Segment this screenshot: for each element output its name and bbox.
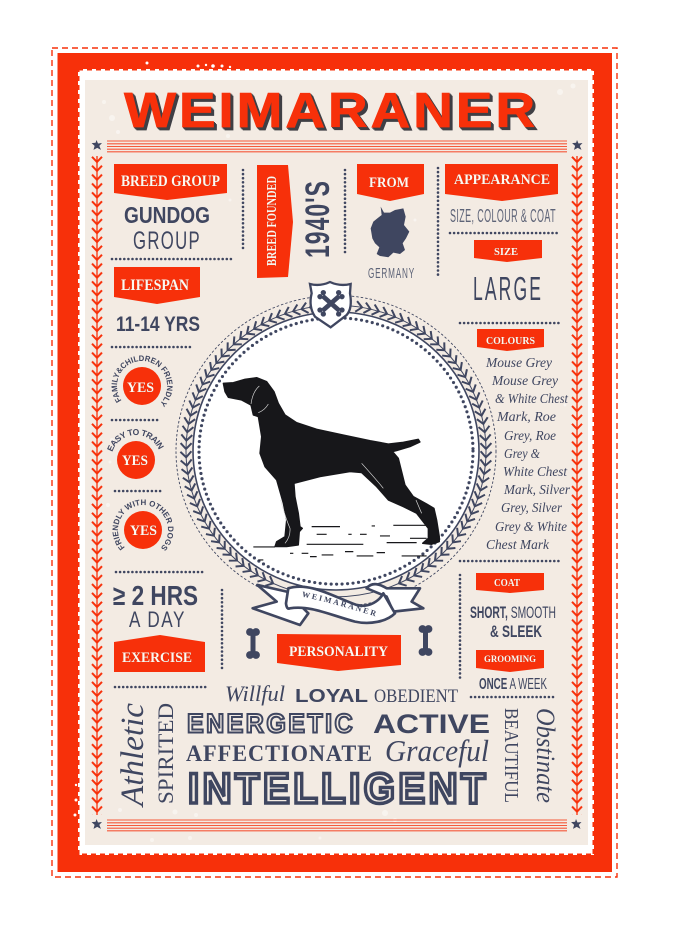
coat ribbon — [476, 573, 544, 593]
yes badge: easy to train — [107, 429, 164, 479]
personality word cloud — [115, 681, 560, 812]
size ribbon: SIZE — [494, 247, 518, 258]
colours list: Mark, Roe — [496, 410, 556, 425]
word: athletic: Athletic — [115, 703, 151, 808]
central dog medallion — [176, 280, 496, 626]
name banner — [251, 582, 425, 626]
breed founded ribbon — [257, 165, 293, 278]
colours list: Mouse Grey — [485, 356, 553, 371]
appearance ribbon: APPEARANCE — [454, 172, 550, 188]
lifespan value: 11-14 YRS — [116, 313, 200, 336]
colours list — [485, 356, 571, 553]
coat value — [470, 603, 556, 641]
colours list: Grey & White — [495, 520, 567, 535]
yes badge: family and children friendly: FAMILY&CHILDREN FRIENDLY — [112, 356, 173, 408]
yes badge: friendly with other dogs: YES — [130, 523, 157, 539]
grooming ribbon — [476, 650, 544, 672]
colours list: White Chest — [503, 465, 568, 480]
colours list: & White Chest — [495, 392, 569, 407]
word: obstinate: Obstinate — [531, 708, 560, 803]
star top right — [572, 140, 582, 150]
word: energetic: ENERGETIC — [187, 710, 355, 739]
title: WEIMARANER — [124, 84, 538, 138]
word: intelligent: INTELLIGENT — [188, 765, 489, 812]
yes badge: easy to train: EASY TO TRAIN — [107, 429, 164, 452]
lifespan ribbon — [114, 267, 200, 304]
word: obedient: OBEDIENT — [374, 686, 458, 707]
colours list: Mouse Grey — [491, 374, 559, 389]
word: active: ACTIVE — [373, 709, 490, 739]
gundog text: GUNDOG — [124, 202, 210, 228]
colours list: Grey & — [504, 447, 540, 462]
name banner: WEIMARANER — [302, 592, 376, 616]
colours ribbon — [477, 329, 544, 351]
right chevron column — [571, 156, 583, 815]
appearance ribbon — [445, 164, 558, 201]
from ribbon: FROM — [369, 175, 409, 191]
yes badge: family and children friendly: YES — [127, 380, 154, 396]
word: graceful: Graceful — [385, 733, 489, 768]
exercise ribbon — [114, 635, 205, 672]
coat ribbon: COAT — [494, 578, 520, 589]
dog silhouette — [223, 378, 439, 560]
paper wear speckles — [102, 84, 576, 842]
breed group ribbon — [114, 164, 227, 200]
coat value: & SLEEK — [490, 622, 543, 641]
group text: GROUP — [133, 227, 201, 255]
coat value: SHORT, SMOOTH — [470, 603, 556, 622]
word: spirited: SPIRITED — [153, 703, 178, 804]
word: willful: Willful — [225, 681, 285, 706]
grooming value: ONCE A WEEK — [479, 676, 547, 693]
word: loyal: LOYAL — [295, 686, 368, 706]
yes badge: easy to train: YES — [122, 453, 148, 469]
bottom stripes — [107, 820, 567, 831]
breed founded ribbon: BREED FOUNDED — [265, 176, 280, 266]
exercise hours: ≥ 2 HRS — [113, 580, 198, 611]
wear marks on frame — [74, 62, 231, 816]
grooming ribbon: GROOMING — [484, 655, 537, 665]
colours list: Grey, Silver — [501, 501, 562, 516]
personality ribbon: PERSONALITY — [289, 644, 388, 660]
word: affectionate: AFFECTIONATE — [186, 741, 373, 766]
lifespan ribbon: LIFESPAN — [121, 277, 189, 294]
colours list: Chest Mark — [486, 538, 550, 553]
laurel wreath ring — [176, 295, 496, 607]
exercise a day: A DAY — [129, 607, 186, 632]
colours ribbon: COLOURS — [486, 336, 535, 347]
personality ribbon — [277, 634, 401, 671]
size value: LARGE — [473, 270, 543, 307]
dotted dividers — [112, 168, 560, 697]
germany label: GERMANY — [368, 265, 415, 282]
founded year: 1940'S — [299, 180, 337, 258]
word: beautiful: BEAUTIFUL — [500, 708, 522, 803]
left chevron column — [91, 156, 103, 815]
cream paper panel — [85, 80, 588, 845]
colours list: Mark, Silver — [503, 483, 571, 498]
breed group ribbon: BREED GROUP — [121, 173, 220, 190]
icon: left bone — [246, 628, 260, 659]
text: SIZE, COLOUR & COAT — [450, 206, 556, 226]
yes badge: friendly with other dogs: FRIENDLY WITH OTHER DOGS — [112, 500, 174, 550]
star bottom left — [92, 819, 102, 829]
star bottom right — [571, 819, 582, 829]
size ribbon — [474, 240, 542, 262]
red frame — [58, 53, 612, 872]
icon: germany map — [371, 207, 409, 257]
white inner mat — [78, 69, 594, 855]
colours list: Grey, Roe — [504, 429, 556, 444]
top stripes — [107, 141, 567, 152]
from ribbon — [357, 164, 424, 201]
serrated inner edge of the frame — [78, 69, 594, 855]
exercise ribbon: EXERCISE — [122, 650, 192, 666]
star top left — [92, 140, 102, 150]
dashed outer border — [52, 48, 617, 877]
icon: right bone — [419, 625, 432, 656]
crossed bones shield — [310, 282, 351, 327]
